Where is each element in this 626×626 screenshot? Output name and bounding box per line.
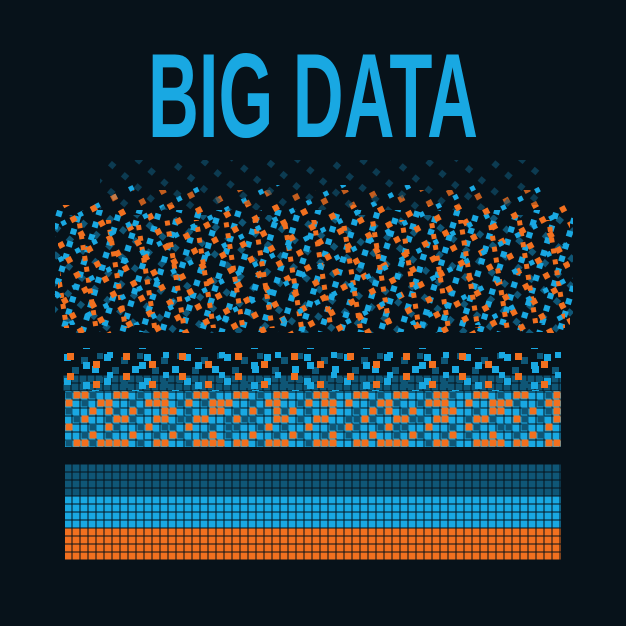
ordered grid block <box>65 464 561 560</box>
transition band <box>63 348 561 391</box>
mixed grid block <box>65 391 561 447</box>
scattered data cloud <box>52 160 573 333</box>
